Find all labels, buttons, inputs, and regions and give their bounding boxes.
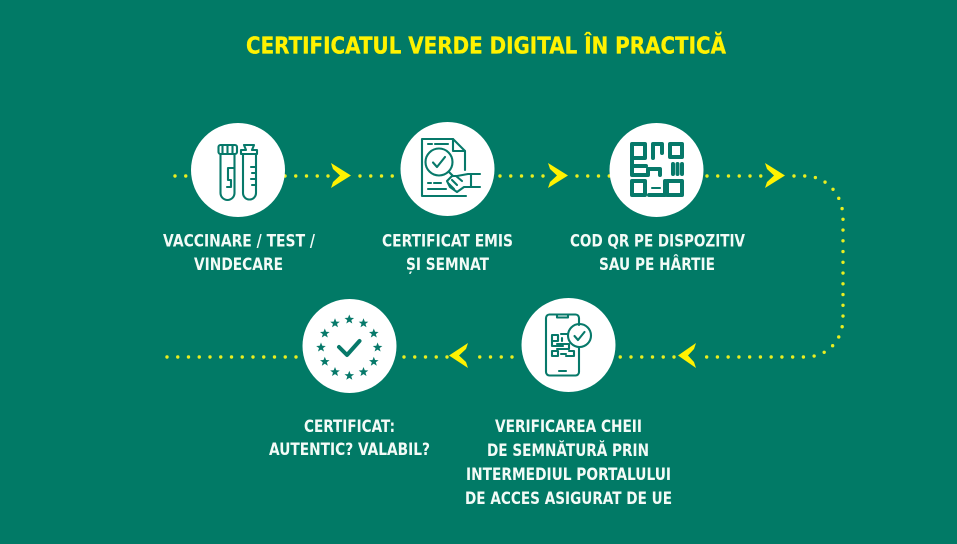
label: validity: CERTIFICAT: — [304, 417, 395, 436]
step 2: certificate issued and signed — [382, 122, 513, 274]
arrow: step 4 to step 5 — [678, 343, 696, 368]
label: certificate: ȘI SEMNAT — [406, 255, 490, 274]
arrow: step 1 to step 2 — [331, 163, 351, 188]
label: QR code — [570, 232, 745, 274]
step 3: QR code — [570, 123, 745, 274]
label: verification: VERIFICAREA CHEII — [495, 417, 642, 436]
label: QR code: COD QR PE DISPOZITIV — [570, 232, 745, 250]
label: validity — [269, 417, 430, 459]
label: vaccination: VINDECARE — [194, 255, 283, 274]
step 5: certificate validity — [269, 299, 430, 459]
title: CERTIFICATUL VERDE DIGITAL ÎN PRACTICĂ — [246, 32, 726, 60]
icon: document with magnifier — [400, 122, 494, 216]
icon: EU stars with check mark — [302, 299, 396, 393]
icon: phone with QR and check badge — [522, 298, 616, 392]
label: certificate — [382, 232, 513, 274]
arrow: step 5 to final line — [449, 343, 468, 368]
label: vaccination: VACCINARE / TEST / — [163, 232, 316, 250]
label: verification — [465, 417, 672, 508]
label: validity: AUTENTIC? VALABIL? — [269, 440, 430, 459]
dotted flow path — [160, 176, 843, 357]
step 1: vaccination / test / recovery — [163, 123, 316, 274]
label: vaccination — [163, 232, 316, 274]
label: verification: INTERMEDIUL PORTALULUI — [466, 465, 671, 484]
arrow: step 2 to step 3 — [548, 163, 568, 188]
label: QR code: SAU PE HÂRTIE — [599, 255, 715, 274]
label: verification: DE ACCES ASIGURAT DE UE — [465, 489, 672, 508]
icon: test tubes — [191, 123, 285, 217]
label: verification: DE SEMNĂTURĂ PRIN — [487, 441, 649, 460]
label: certificate: CERTIFICAT EMIS — [382, 232, 513, 250]
arrow: step 3 to step 4 — [765, 163, 785, 188]
step 4: key verification — [465, 298, 672, 508]
icon: QR code — [610, 123, 704, 217]
